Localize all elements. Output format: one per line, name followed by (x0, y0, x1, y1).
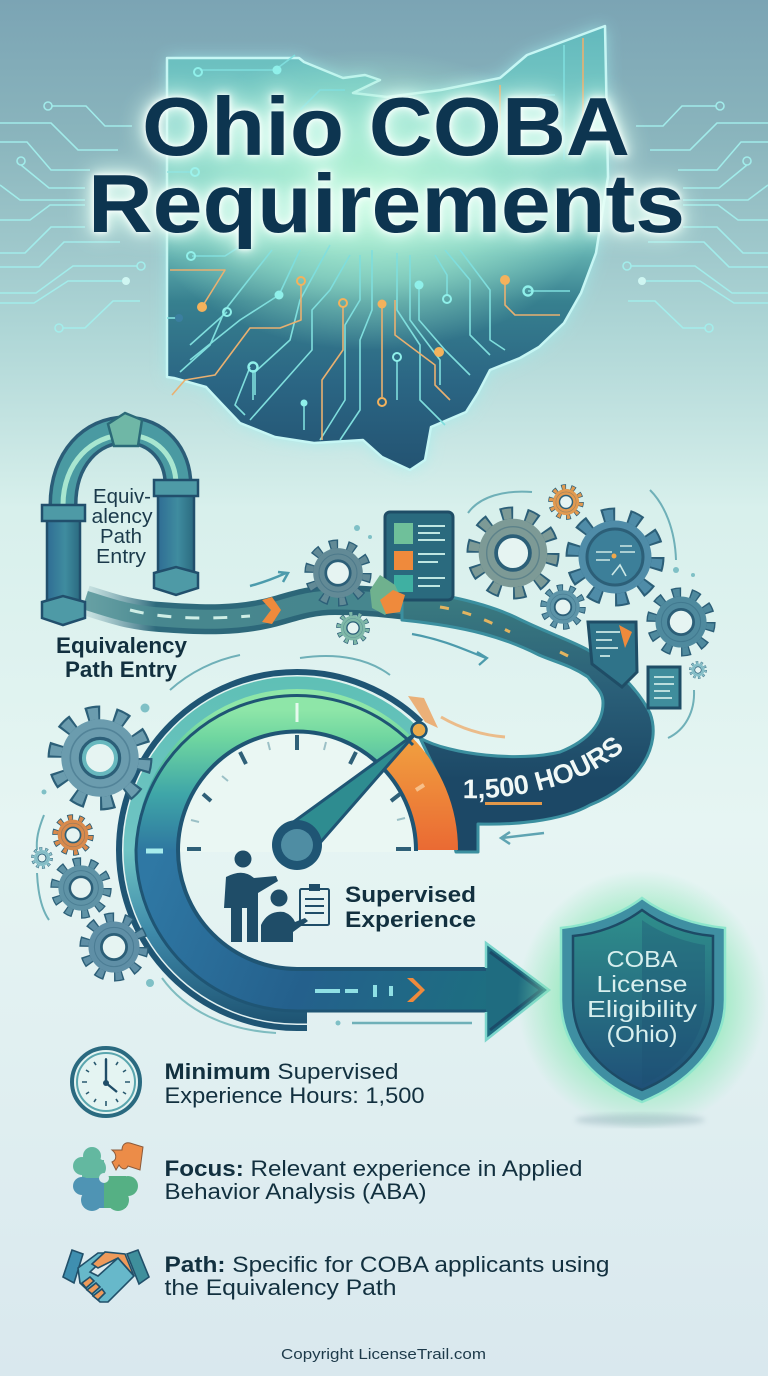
title: Ohio COBA (142, 80, 630, 173)
entry label: Equivalency (56, 633, 188, 658)
band: orange (396, 751, 437, 850)
arch text: Entry (96, 546, 146, 568)
gear (652, 593, 710, 651)
icon: brain puzzle (73, 1143, 143, 1211)
entry label (56, 633, 188, 682)
focus text: Behavior Analysis (ABA) (164, 1179, 426, 1204)
outer rings (119, 672, 421, 1028)
band inner edge (178, 731, 486, 969)
lower road arrow (412, 634, 487, 665)
gear: small (33, 849, 51, 867)
circuit lines: left (0, 102, 145, 332)
title: Requirements (88, 157, 685, 250)
road chevron (262, 597, 281, 624)
icon: handshake (63, 1250, 149, 1302)
gear (55, 713, 145, 803)
minimum hours text (164, 1059, 424, 1108)
band outer edge (136, 696, 486, 1011)
hours label: 1,500 HOURS (464, 738, 622, 802)
arrow small line (352, 1022, 472, 1024)
orange smudge (408, 696, 505, 737)
gear (309, 544, 367, 602)
left arc (162, 978, 276, 1033)
shield: COBA license eligibility (517, 870, 767, 1130)
band highlights (146, 848, 163, 854)
road: winding path from arch (85, 600, 440, 619)
gear: orange (55, 817, 91, 853)
gear (85, 918, 143, 976)
chart face inside big gear (587, 529, 643, 585)
gauge (119, 672, 490, 1028)
title (88, 80, 685, 250)
standing person (224, 850, 278, 942)
document panel (385, 512, 453, 600)
arch text (92, 486, 152, 568)
needle hub (272, 820, 322, 870)
right pillar (158, 490, 194, 575)
road arrow (250, 572, 288, 586)
supervised experience label (345, 882, 476, 932)
supervised experience label: Supervised (345, 882, 476, 907)
gears cluster: left (33, 713, 145, 976)
supervised experience label: Experience (345, 907, 476, 932)
gear (55, 862, 107, 914)
arch: equivalency path entry (42, 413, 198, 625)
document: upper (588, 622, 637, 687)
supervised experience icon (224, 850, 329, 942)
road dashes (440, 607, 572, 658)
gear: pale (339, 614, 367, 642)
shield text: Eligibility (587, 996, 698, 1022)
path text: the Equivalency Path (164, 1275, 396, 1300)
gears cluster: upper (309, 487, 710, 678)
accent dots (42, 525, 695, 1026)
arch keystone (108, 413, 142, 446)
arch text: Path (100, 526, 142, 548)
gear inner accent (84, 742, 116, 774)
copyright: Copyright LicenseTrail.com (281, 1346, 486, 1363)
shield text: COBA (606, 946, 678, 972)
minimum hours text: Minimum Supervised (164, 1059, 399, 1084)
left pillar (47, 510, 80, 610)
band: lower arrow (157, 850, 490, 990)
map circuit traces (167, 38, 583, 440)
road decoration: orange star and map scraps (370, 575, 405, 615)
gear: small (690, 662, 706, 678)
clipboard (300, 884, 329, 925)
arch text: alency (92, 506, 152, 528)
arrow head (315, 943, 549, 1040)
gauge ticks (187, 735, 411, 849)
dark road: 1,500 hours (400, 596, 655, 854)
Ohio state map (140, 26, 608, 470)
needle tip (412, 722, 426, 738)
gear (544, 588, 582, 626)
arch text: Equiv- (93, 486, 151, 508)
gear (573, 515, 657, 599)
focus text: Focus: Relevant experience in Applied (164, 1156, 582, 1181)
focus text (164, 1156, 582, 1204)
shield text: License (596, 971, 688, 997)
entry label: Path Entry (65, 657, 178, 682)
circuit lines: right (623, 102, 768, 332)
gauge needle (288, 733, 416, 852)
path text: Path: Specific for COBA applicants using (164, 1252, 610, 1277)
shield text (587, 946, 698, 1047)
motion arcs (37, 490, 694, 920)
path text (164, 1252, 610, 1300)
document: lower (648, 667, 680, 708)
band: blue to green (157, 710, 396, 850)
gauge face (179, 734, 415, 852)
shield text: (Ohio) (606, 1021, 678, 1047)
minimum hours text: Experience Hours: 1,500 (164, 1083, 424, 1108)
gear (474, 514, 552, 592)
icon: clock (72, 1048, 140, 1116)
underline (485, 802, 542, 805)
gear: orange (551, 487, 581, 517)
seated person (261, 890, 308, 942)
left return arrow (501, 832, 544, 844)
chevrons and dashes (407, 978, 425, 1002)
